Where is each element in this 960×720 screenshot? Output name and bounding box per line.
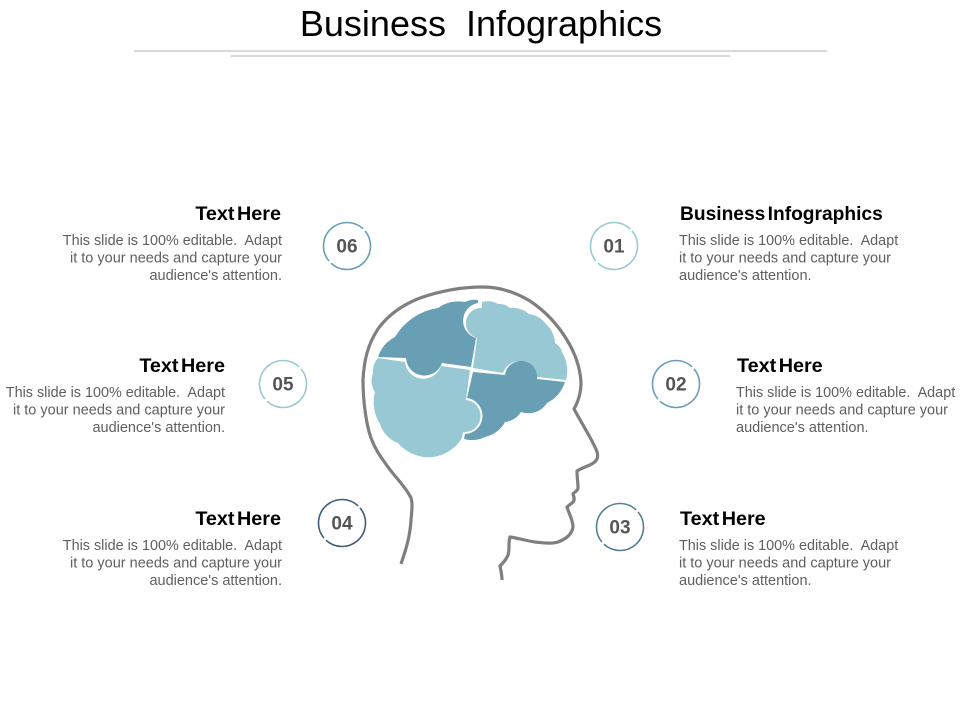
text block 02: This slide is 100% editable. Adapt [736, 385, 955, 401]
text block 04 [63, 508, 282, 589]
text block 03: Text Here [680, 508, 766, 530]
badge 01: 01 [603, 236, 625, 258]
text block 05: Text Here [139, 355, 225, 377]
text block 06: This slide is 100% editable. Adapt [63, 233, 282, 249]
badge 03: 03 [609, 518, 631, 538]
text block 05: This slide is 100% editable. Adapt [6, 385, 225, 401]
badge 02: 02 [665, 374, 687, 396]
text block 01: it to your needs and capture your [679, 250, 891, 266]
badge 04: 04 [331, 514, 353, 534]
brain piece: top left [378, 300, 478, 376]
text block 01: audience's attention. [679, 268, 812, 284]
text block 06 [63, 203, 282, 284]
title: Business Infographics [300, 3, 662, 44]
text block 03: This slide is 100% editable. Adapt [679, 538, 898, 554]
text block 04: This slide is 100% editable. Adapt [63, 538, 282, 554]
badge 02 [643, 351, 709, 417]
badge 03 [587, 494, 653, 560]
badge 05: 05 [272, 374, 294, 396]
text block 06: it to your needs and capture your [70, 250, 282, 266]
text block 06: Text Here [195, 203, 281, 225]
badge 06: 06 [336, 236, 358, 258]
badge 04 [309, 490, 375, 556]
text block 01 [679, 204, 898, 284]
brain piece: top right [466, 301, 567, 380]
text block 02: it to your needs and capture your [736, 402, 948, 418]
text block 02: audience's attention. [736, 420, 869, 436]
head outline [363, 287, 598, 580]
text block 01: This slide is 100% editable. Adapt [679, 233, 898, 249]
text block 04: Text Here [195, 508, 281, 530]
text block 02 [736, 355, 955, 436]
brain piece: bottom right [464, 361, 565, 440]
badge 06 [314, 213, 380, 279]
head with puzzle brain [363, 287, 598, 580]
text block 03: audience's attention. [679, 573, 812, 589]
brain piece: bottom left [371, 358, 481, 457]
text block 05: audience's attention. [92, 420, 225, 436]
text block 06: audience's attention. [149, 268, 282, 284]
text block 04: audience's attention. [149, 573, 282, 589]
text block 03 [679, 508, 898, 589]
badge 01 [581, 213, 647, 279]
text block 03: it to your needs and capture your [679, 556, 891, 572]
text block 01: Business Infographics [680, 204, 883, 225]
text block 04: it to your needs and capture your [70, 556, 282, 572]
badge 05 [250, 351, 316, 417]
text block 05 [6, 355, 225, 436]
text block 05: it to your needs and capture your [13, 402, 225, 418]
text block 02: Text Here [737, 355, 823, 377]
